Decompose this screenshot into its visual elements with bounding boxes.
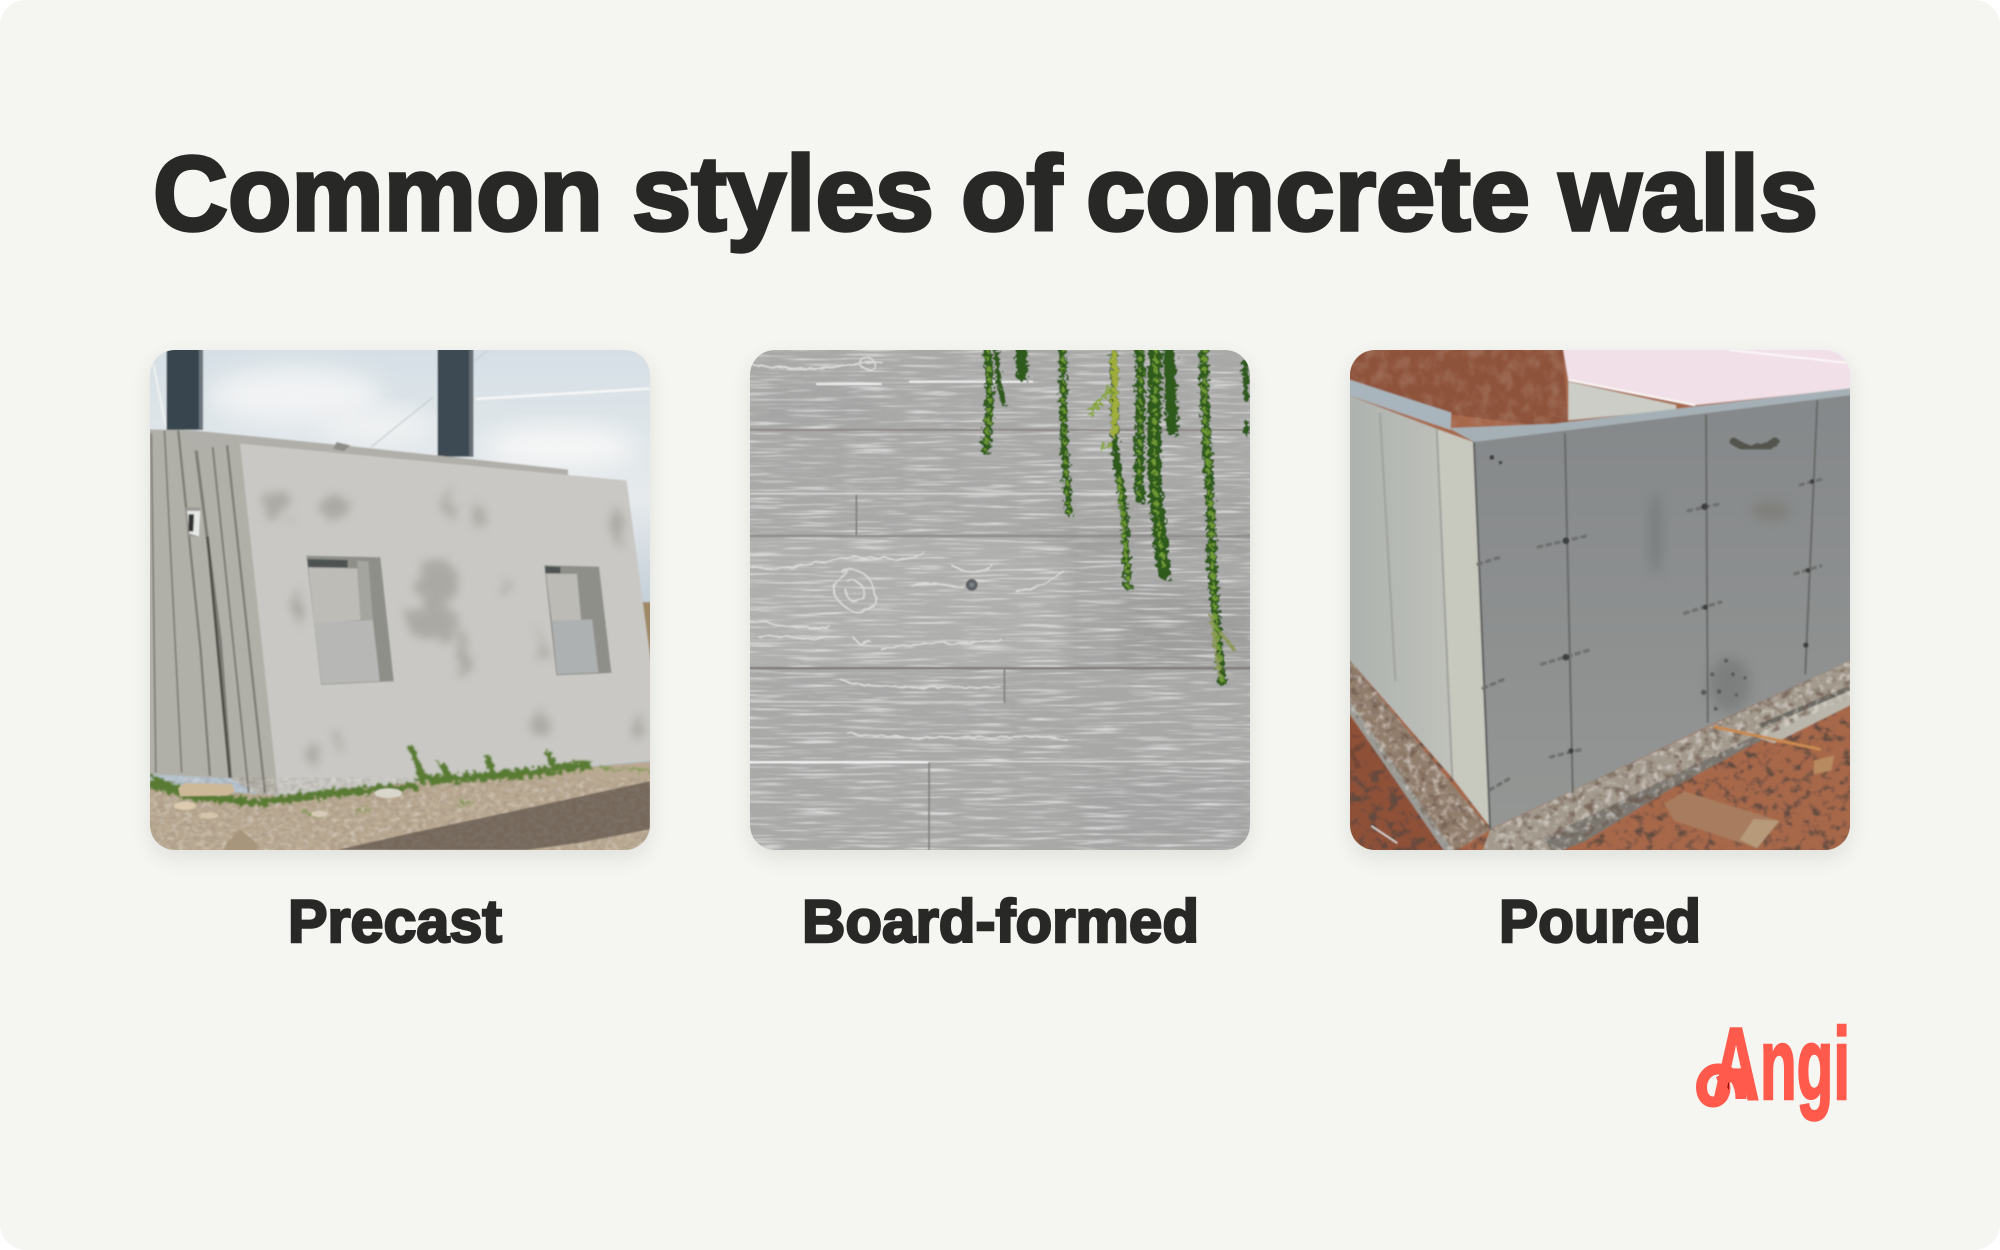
label: Poured: Poured: [1499, 888, 1701, 955]
debris: [1664, 791, 1779, 848]
title: styles: [632, 135, 934, 253]
title: Common: [153, 135, 603, 253]
top surfaces: [1563, 347, 1853, 405]
photo: poured concrete wall: [1350, 350, 1850, 850]
title: concrete: [1086, 135, 1530, 253]
title: [153, 135, 1818, 253]
logo: Angi: [1702, 1007, 1850, 1121]
vines: [986, 347, 1247, 681]
soil: [1347, 347, 1853, 853]
logo: Angi: A: [1713, 1007, 1759, 1121]
photo: precast concrete wall: [150, 350, 650, 850]
title: of: [961, 135, 1063, 253]
label: Board-formed: Board-formed: [802, 888, 1199, 955]
right wall: [1474, 395, 1853, 829]
footing: [1347, 657, 1490, 853]
logo: Angi: ngi: [1760, 1007, 1850, 1121]
photo: board-formed concrete wall: [750, 350, 1250, 850]
left wall: [1347, 395, 1452, 778]
title: walls: [1558, 135, 1818, 253]
label: Precast: Precast: [288, 888, 502, 955]
